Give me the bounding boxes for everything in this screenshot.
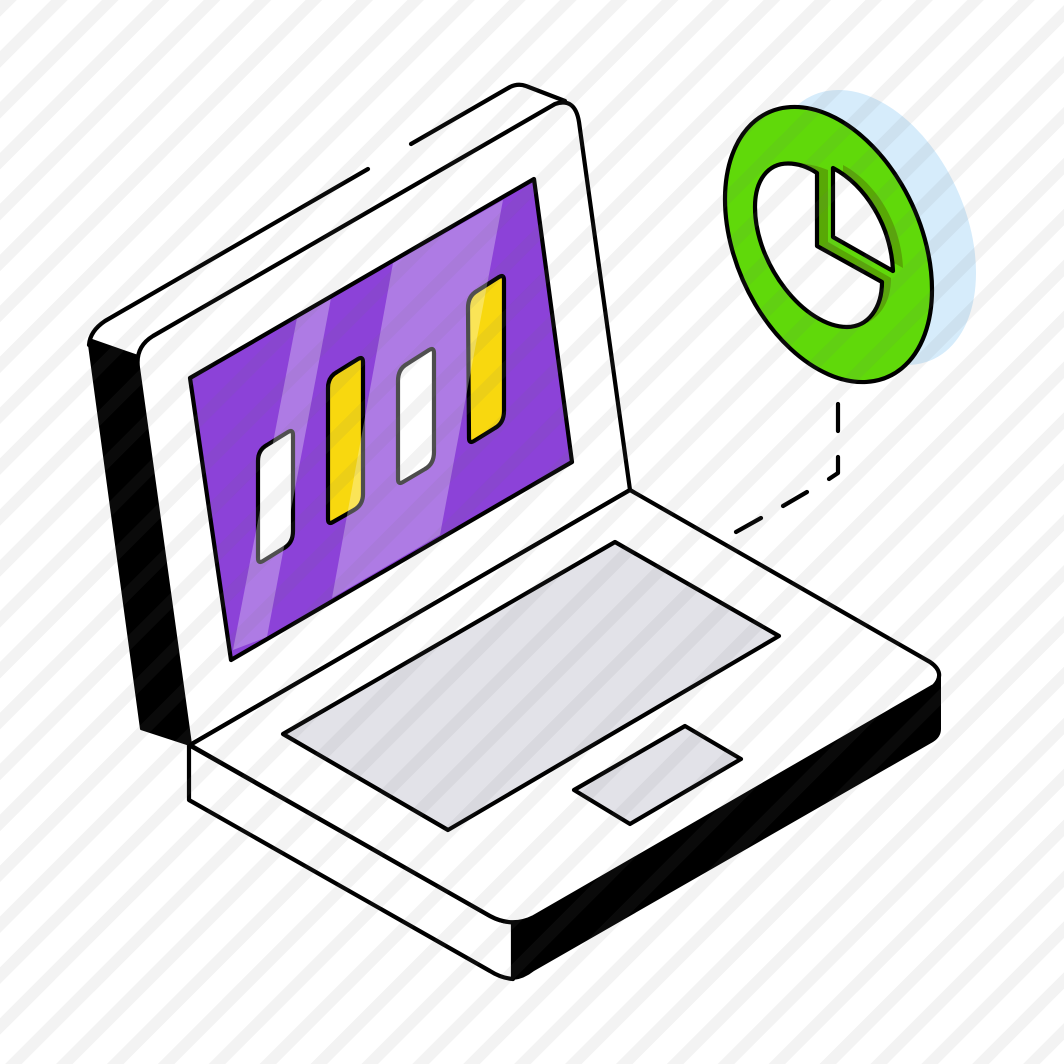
lid black side xyxy=(89,340,190,745)
screen glare xyxy=(233,200,503,650)
bar 3 white xyxy=(398,349,434,483)
base front side xyxy=(189,745,513,979)
screen outline xyxy=(190,179,572,660)
bar 2 yellow xyxy=(328,358,363,523)
trackpad xyxy=(574,726,741,824)
keyboard xyxy=(283,542,779,830)
base top xyxy=(190,490,939,922)
lid back edge xyxy=(89,85,565,345)
bar 1 white xyxy=(258,431,293,562)
screen xyxy=(190,179,572,660)
dashed connector xyxy=(736,404,838,532)
pie small slice xyxy=(833,168,893,271)
bar 4 yellow xyxy=(468,276,504,442)
green ring xyxy=(725,69,932,420)
pie depth shadow xyxy=(800,163,903,327)
pie main slice xyxy=(755,164,882,327)
laptop xyxy=(89,85,941,980)
ring back shadow xyxy=(769,52,976,403)
screen background xyxy=(190,179,572,660)
base black side xyxy=(513,676,941,980)
pie chart icon xyxy=(725,52,976,420)
lid bezel xyxy=(138,102,630,745)
